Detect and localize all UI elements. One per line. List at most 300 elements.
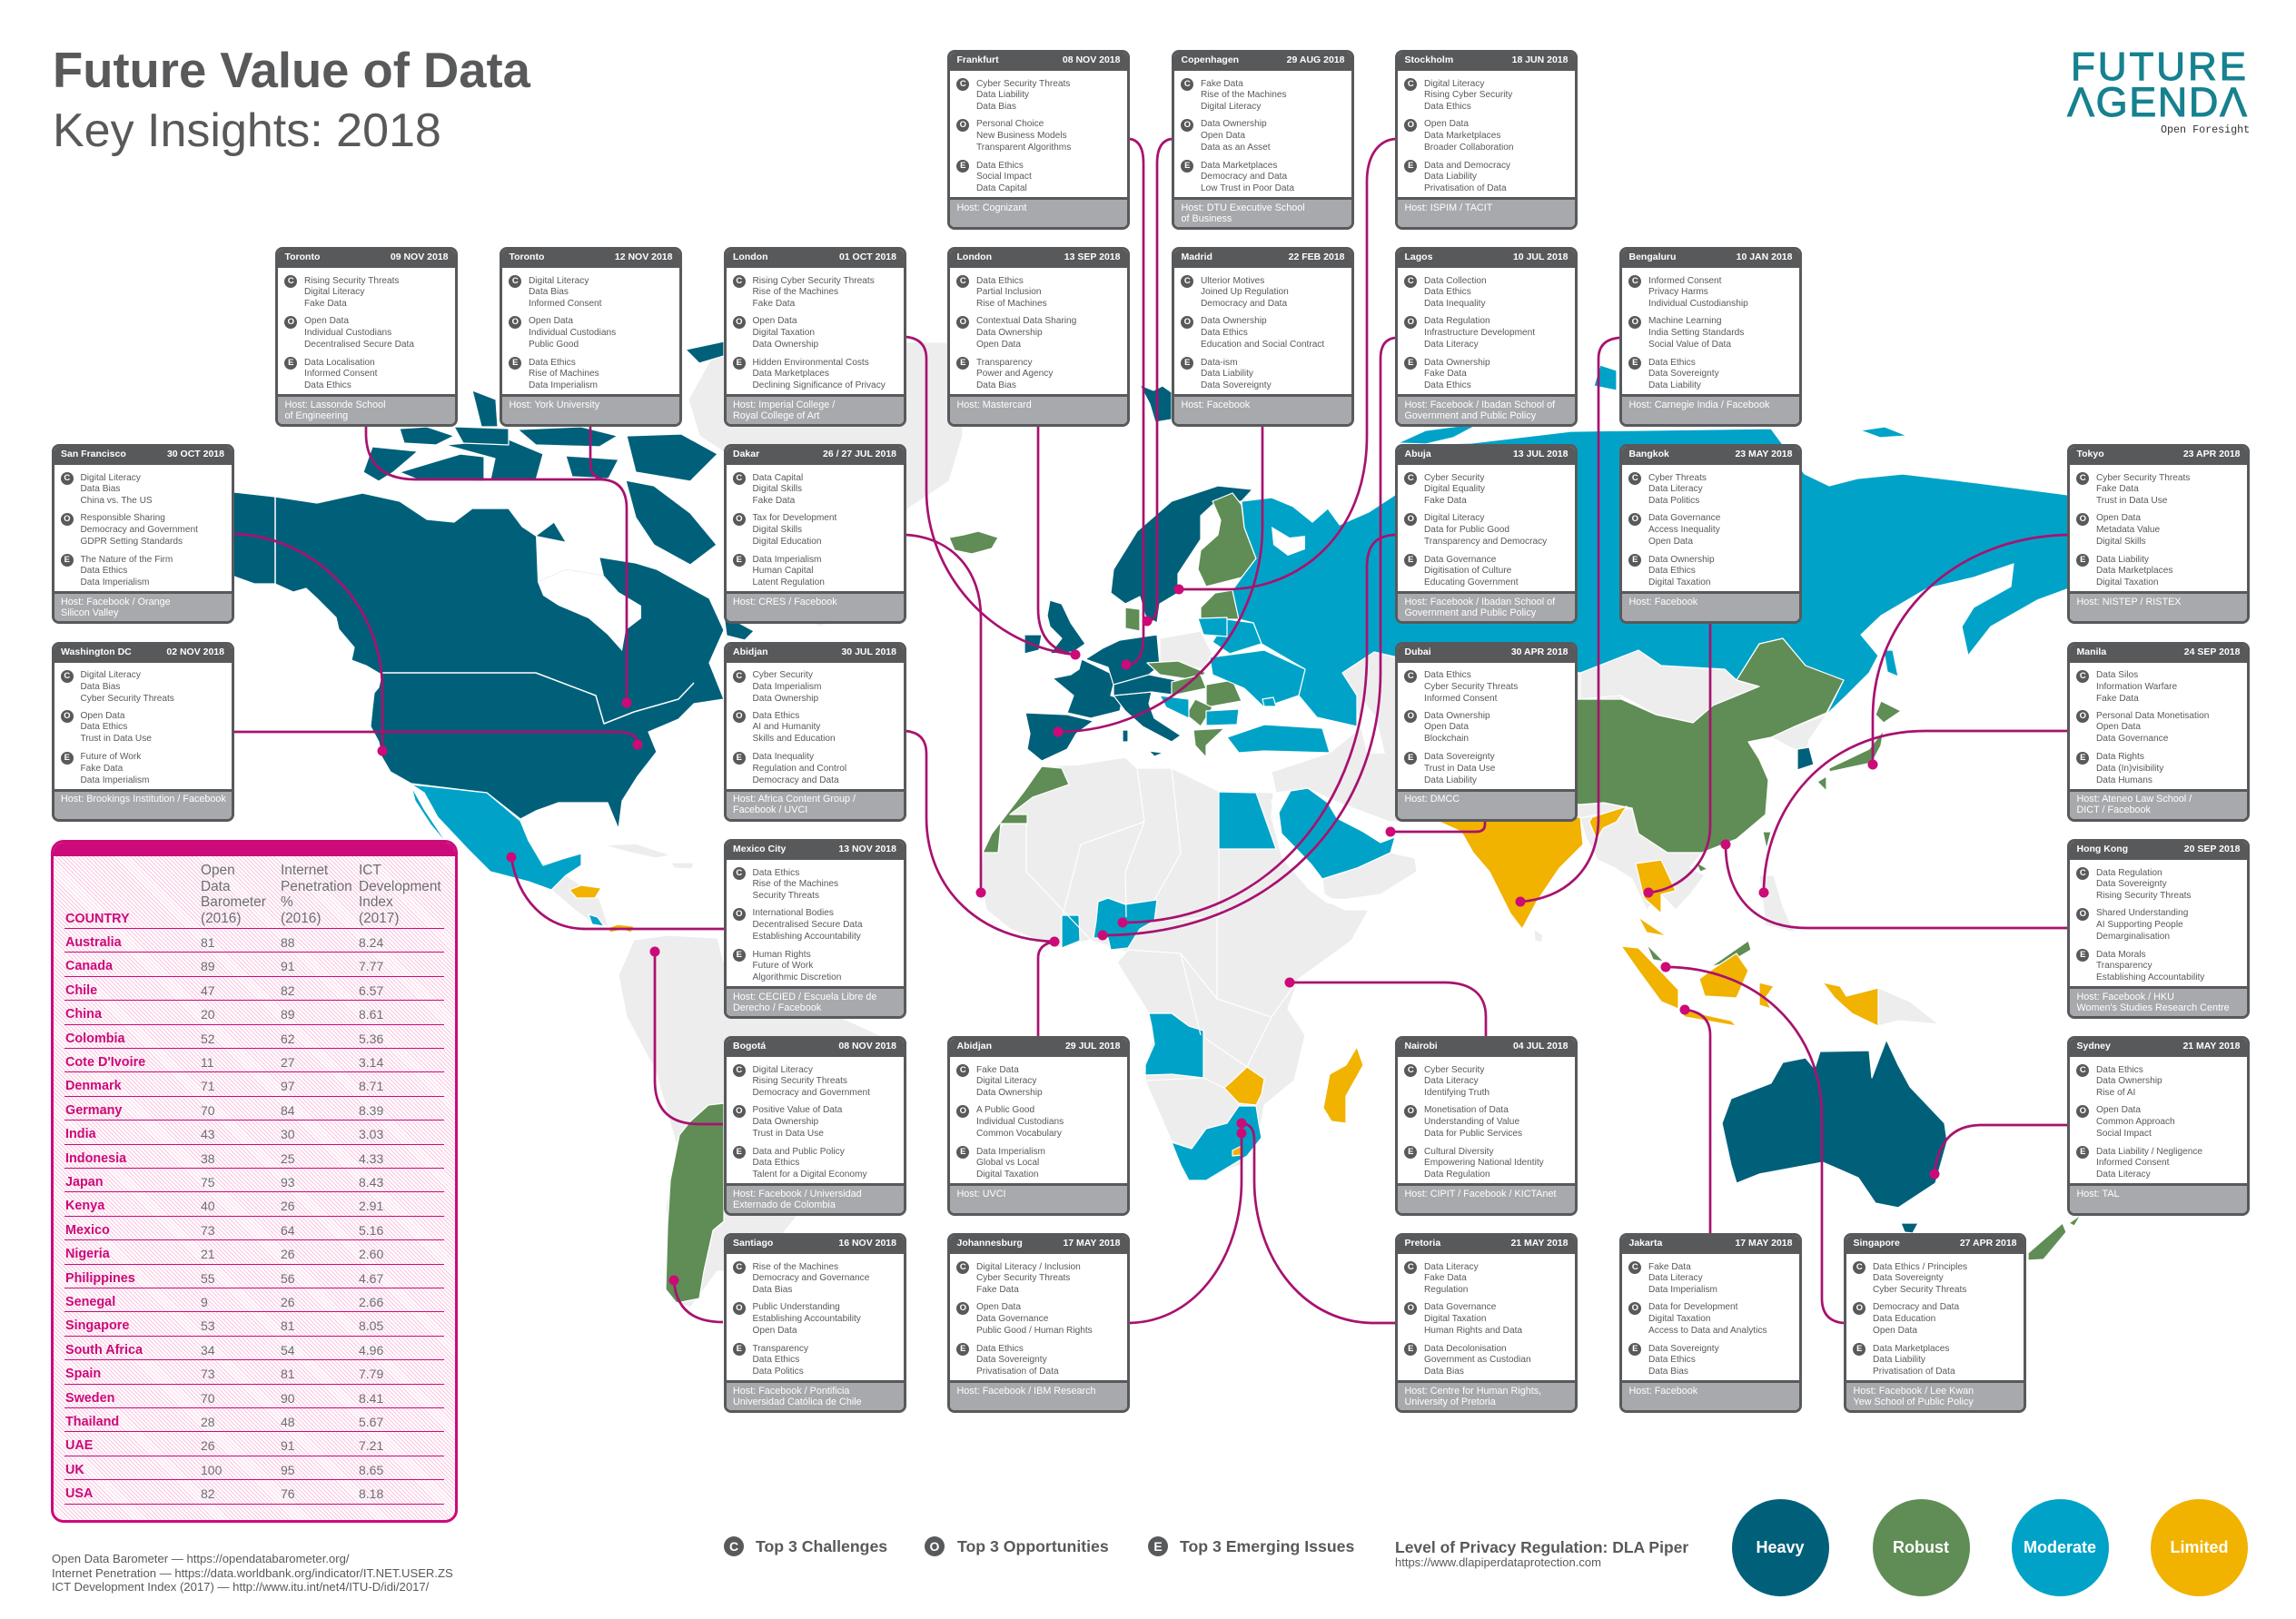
opportunities (752, 908, 905, 943)
challenges: Rise of the Machines (752, 1262, 838, 1271)
opportunities: Data Ownership (1424, 710, 1490, 721)
emerging issues: Data Ethics (1648, 358, 1696, 367)
card: Abidjan 30 Jul (723, 641, 906, 821)
host: Host: Lassonde School (285, 400, 386, 410)
emerging issues (1424, 1344, 1577, 1378)
host: Host: Ateneo Law School / (2076, 794, 2192, 805)
host (950, 1183, 1127, 1216)
card: Stockholm: C (1408, 79, 1414, 89)
opportunities (1404, 513, 1548, 547)
header (727, 250, 903, 268)
header: 29 JUL 2018 (1065, 1041, 1121, 1051)
emerging issues (80, 752, 233, 787)
header: Manila (2076, 647, 2106, 657)
card: Santiago: C (736, 1262, 742, 1272)
challenges: Cyber Security (1424, 1064, 1484, 1075)
card: Dakar: E (737, 555, 742, 565)
card: London 01 Oct (723, 247, 906, 427)
emerging issues: Data Decolonisation (1424, 1344, 1507, 1353)
row: Canada: 89 (201, 959, 215, 973)
challenges (1648, 472, 1801, 508)
opportunities: Data Governance (976, 1314, 1048, 1324)
row: Sweden: 8.41 (359, 1391, 383, 1406)
emerging issues (1424, 752, 1577, 787)
card: Washington DC: O (64, 711, 71, 721)
emerging issues: Human Capital (752, 566, 813, 576)
challenges: Cyber Security (1424, 472, 1484, 483)
emerging issues: Data Bias (1424, 1367, 1464, 1377)
host (1398, 1380, 1575, 1413)
challenges: Data Ethics (1424, 102, 1471, 112)
header (2070, 842, 2247, 860)
row: Philippines: 55 (201, 1271, 215, 1286)
row: South Africa: South Africa (65, 1343, 143, 1357)
opportunities (1873, 1302, 2025, 1338)
opportunities (956, 316, 1076, 350)
emerging issues: Data Liability (1424, 775, 1477, 785)
emerging issues (1404, 160, 1510, 193)
opportunities (2096, 710, 2249, 745)
header: 26 / 27 JUL 2018 (823, 449, 896, 459)
host: DICT / Facebook (2076, 805, 2151, 815)
challenges (2096, 670, 2249, 706)
card: Frankfurt: C (960, 79, 966, 89)
challenges: Rising Cyber Security (1424, 90, 1512, 100)
challenges: Fake Data (1648, 1262, 1691, 1271)
card: London 01 Oct: O (736, 316, 743, 327)
challenges: Data Bias (976, 102, 1016, 112)
data sources (52, 1552, 453, 1594)
header: 27 APR 2018 (1960, 1238, 2016, 1249)
opportunities: Personal Choice (976, 119, 1044, 129)
card: Bangkok: C (1632, 473, 1638, 483)
opportunities: Common Vocabulary (976, 1129, 1062, 1139)
opportunities: Data Ownership (1201, 316, 1267, 326)
challenges: Rising Security Threats (752, 1076, 847, 1086)
row: Kenya: 40 (201, 1199, 215, 1213)
row: Indonesia: Indonesia (65, 1151, 126, 1166)
host: Derecho / Facebook (733, 1002, 821, 1013)
challenges (1404, 472, 1485, 506)
opportunities: International Bodies (752, 908, 834, 918)
challenges: Data Literacy (1424, 1262, 1479, 1271)
emerging issues (956, 160, 1032, 193)
host: Host: Mastercard (957, 400, 1032, 410)
header: London (733, 252, 767, 262)
row: Thailand (64, 1408, 444, 1432)
opportunities: Understanding of Value (1424, 1117, 1519, 1127)
opportunities (976, 1105, 1129, 1140)
header (1398, 250, 1575, 268)
opportunities: Establishing Accountability (752, 1314, 861, 1324)
header (1622, 447, 1799, 465)
row: South Africa: 54 (281, 1343, 295, 1357)
emerging issues: Data Ethics (80, 566, 127, 576)
challenges: Data Ethics (752, 868, 799, 877)
challenges: Privacy Harms (1648, 287, 1708, 297)
opportunities: Open Data (1201, 131, 1245, 141)
card: Abidjan 30 Jul: C (736, 670, 742, 681)
card: Washington DC: E (64, 752, 70, 763)
row: USA: USA (65, 1486, 93, 1501)
emerging issues: Educating Government (1424, 578, 1519, 587)
header: Bengaluru (1629, 252, 1676, 262)
opportunities (509, 316, 616, 350)
challenges: Fake Data (304, 299, 347, 309)
challenges: Individual Custodianship (1648, 299, 1748, 309)
line: Madrid (1058, 427, 1262, 732)
opportunities: Open Data (752, 1326, 797, 1336)
emerging issues: Global vs Local (976, 1158, 1039, 1168)
host: Host: Facebook / Ibadan School of (1404, 400, 1555, 410)
header: Bangkok (1629, 449, 1669, 459)
column header: Internet Penetration: % (281, 894, 293, 910)
card: Pretoria: C (1408, 1262, 1414, 1272)
card: Santiago: E (737, 1344, 742, 1354)
challenges: Digital Literacy (752, 1064, 813, 1075)
host: Host: DMCC (1404, 794, 1460, 805)
opportunities: Data Ownership (1201, 119, 1267, 129)
icon: E badge: E (1153, 1539, 1163, 1554)
emerging issues: Data Morals (2096, 950, 2146, 959)
host: Facebook / UVCI (733, 805, 807, 815)
data sources: ICT Development Index (2017) — http://www.itu.int/net4/ITU-D/idi/2017/ (52, 1580, 429, 1594)
row: Japan: Japan (65, 1175, 104, 1190)
row: Colombia: 5.36 (359, 1032, 383, 1046)
row: Philippines: 4.67 (359, 1271, 383, 1286)
card: Toronto 12 Nov: E (512, 358, 518, 368)
challenges (752, 1262, 905, 1297)
opportunities (1181, 316, 1324, 350)
host (2070, 591, 2247, 624)
header: 01 OCT 2018 (839, 252, 896, 262)
card: Santiago: O (736, 1302, 743, 1313)
row: UK: 100 (201, 1463, 222, 1477)
card: Bogotá: E (737, 1147, 742, 1157)
emerging issues: Data Bias (976, 380, 1016, 390)
row: UK: 8.65 (359, 1463, 383, 1477)
opportunities (1648, 1302, 1801, 1338)
challenges: Data Bias (80, 484, 120, 494)
row: South Africa: 4.96 (359, 1343, 383, 1357)
emerging issues: Government as Custodian (1424, 1355, 1531, 1365)
row: Sweden: 70 (201, 1391, 215, 1406)
legend: privacy regulation source: https://www.dlapiperdataprotection.com (1395, 1555, 1601, 1569)
card: Stockholm (1395, 50, 1578, 230)
card: Singapore: E (1856, 1344, 1862, 1354)
challenges: Data Ownership (976, 1088, 1043, 1098)
header (1622, 1236, 1799, 1254)
row: UAE: UAE (65, 1438, 93, 1453)
card: Pretoria: E (1408, 1344, 1413, 1354)
header (1622, 250, 1799, 268)
card: Bogotá (723, 1036, 906, 1216)
challenges: Rise of the Machines (1201, 90, 1287, 100)
host: Host: Facebook / Ibadan School of (1404, 596, 1555, 607)
challenges: Data Bias (80, 682, 120, 692)
row: Sweden: 90 (281, 1391, 295, 1406)
row: Cote D'Ivoire: 3.14 (359, 1055, 383, 1070)
emerging issues: Data Ethics (752, 1355, 799, 1365)
emerging issues (752, 752, 905, 787)
challenges (1404, 78, 1513, 112)
card: Bogotá: O (736, 1106, 743, 1115)
opportunities: AI Supporting People (2096, 920, 2183, 930)
opportunities: Open Data (976, 1302, 1021, 1312)
legend: top 3 opportunities (925, 1536, 1111, 1558)
row: Sweden (64, 1385, 444, 1408)
emerging issues: Regulation and Control (752, 764, 846, 774)
card: Dubai: C (1408, 670, 1414, 681)
challenges: Cyber Security Threats (976, 1273, 1070, 1283)
row: Canada: Canada (65, 959, 113, 973)
row: Germany: Germany (65, 1103, 122, 1118)
challenges (1404, 275, 1487, 309)
line: Hong Kong (1726, 844, 2067, 928)
header: Abuja (1404, 449, 1431, 459)
challenges: Cyber Security Threats (976, 78, 1070, 89)
emerging issues: Hidden Environmental Costs (752, 358, 869, 367)
card: Manila: E (2080, 752, 2085, 763)
host: Host: CRES / Facebook (733, 596, 837, 607)
row: Australia: 88 (281, 935, 295, 950)
row: Colombia: 62 (281, 1032, 295, 1046)
challenges: Data Ethics (1424, 287, 1471, 297)
row: Thailand: 28 (201, 1415, 215, 1429)
emerging issues: Data Imperialism (976, 1146, 1045, 1157)
line: Mexico City (511, 857, 724, 929)
column header: Internet Penetration: Penetration (281, 879, 352, 894)
header: 12 NOV 2018 (615, 252, 672, 262)
opportunities (2096, 908, 2249, 943)
card: London 01 Oct: C (736, 276, 742, 286)
card: San Francisco: E (64, 555, 70, 565)
header (54, 645, 231, 663)
emerging issues: Privatisation of Data (976, 1367, 1059, 1377)
opportunities (1648, 513, 1801, 548)
header: Sydney (2076, 1041, 2111, 1051)
line: Johannesburg (1130, 1133, 1242, 1323)
emerging issues: Informed Consent (2096, 1158, 2169, 1168)
card: Johannesburg: C (960, 1262, 966, 1272)
emerging issues (1424, 1146, 1577, 1181)
card: Bengaluru (1619, 247, 1802, 427)
row: Denmark (64, 1072, 444, 1097)
card: Jakarta: C (1632, 1262, 1638, 1272)
row: Kenya: Kenya (65, 1199, 104, 1213)
row: UAE: 26 (201, 1438, 215, 1453)
header: 09 NOV 2018 (391, 252, 449, 262)
host: Externado de Colombia (733, 1199, 836, 1210)
challenges (733, 275, 875, 309)
opportunities: Public Understanding (752, 1302, 840, 1312)
line: Lagos (1103, 338, 1395, 935)
emerging issues: Data Sovereignty (1424, 752, 1495, 762)
row: Mexico: 5.16 (359, 1223, 383, 1238)
card: Toronto 12 Nov: C (512, 276, 519, 286)
emerging issues: Data Ownership (1648, 554, 1715, 565)
host (727, 986, 903, 1019)
opportunities: Responsible Sharing (80, 513, 165, 523)
row: USA (64, 1480, 444, 1505)
challenges (2096, 472, 2249, 508)
opportunities: Digital Skills (2096, 537, 2146, 547)
emerging issues: Fake Data (1424, 369, 1467, 379)
map: moderate regulation countries (411, 365, 2180, 1180)
opportunities: Tax for Development (752, 513, 836, 523)
row: Chile: 6.57 (359, 983, 383, 998)
challenges: Cyber Security Threats (1873, 1285, 1966, 1295)
row: Chile: 47 (201, 983, 215, 998)
challenges (956, 78, 1070, 112)
row: India: 3.03 (359, 1127, 383, 1141)
row: Mexico: 64 (281, 1223, 295, 1238)
challenges: Data Ownership (2096, 1076, 2162, 1086)
card: Toronto 09 Nov: E (288, 358, 293, 368)
challenges (752, 670, 905, 706)
challenges (80, 670, 233, 706)
row: South Africa (64, 1337, 444, 1360)
emerging issues: Democracy and Data (752, 775, 839, 785)
host: Host: Brookings Institution / Facebook (61, 794, 226, 805)
row: Chile: 82 (281, 983, 295, 998)
challenges: Fake Data (1424, 1273, 1467, 1283)
emerging issues: Data Imperialism (529, 380, 598, 390)
row: China: China (65, 1007, 102, 1022)
legend circle: Moderate: Moderate (2024, 1538, 2096, 1556)
header (278, 250, 455, 268)
line: Abidjan 30 Jul (906, 731, 1054, 942)
host (727, 591, 903, 624)
challenges: Rising Security Threats (2096, 891, 2191, 901)
emerging issues: Transparency (976, 358, 1033, 367)
emerging issues (1404, 357, 1490, 390)
opportunities: Infrastructure Development (1424, 328, 1535, 338)
row: Singapore: 81 (281, 1318, 295, 1333)
challenges: Data Regulation (2096, 868, 2162, 877)
challenges (2096, 868, 2249, 903)
emerging issues (2096, 752, 2249, 787)
row: China (64, 1001, 444, 1025)
header (1398, 53, 1575, 71)
row: Colombia (64, 1025, 444, 1049)
row: Senegal: 26 (281, 1295, 295, 1309)
emerging issues: Data Marketplaces (752, 369, 829, 379)
line: Toronto 12 Nov (590, 427, 607, 479)
emerging issues: Data Capital (976, 183, 1027, 193)
opportunities: Open Data (304, 316, 349, 326)
card: Abidjan 30 Jul: O (736, 711, 743, 721)
card: Toronto 09 Nov: O (288, 316, 294, 327)
emerging issues (752, 1146, 905, 1181)
host: Host: DTU Executive School (1181, 202, 1305, 212)
header: Toronto (285, 252, 320, 262)
row: South Africa: 34 (201, 1343, 215, 1357)
label: Top 3 Emerging Issues (1180, 1537, 1354, 1555)
row: Denmark: 71 (201, 1079, 215, 1093)
line: Dakar (906, 535, 981, 893)
subtitle: Key Insights: 2018 (53, 104, 441, 157)
challenges: Fake Data (752, 299, 795, 309)
header (950, 1039, 1127, 1057)
challenges: Data Silos (2096, 670, 2138, 680)
row: Singapore (64, 1312, 444, 1337)
card: Madrid (1172, 247, 1354, 427)
card: San Francisco: C (64, 473, 70, 483)
emerging issues: Digital Taxation (2096, 578, 2158, 587)
host: Host: Facebook / Orange (61, 596, 171, 607)
line: Frankfurt (1126, 139, 1143, 665)
card: London 01 Oct: E (737, 358, 742, 368)
card: London 13 Sep (947, 247, 1130, 427)
header: 21 MAY 2018 (1510, 1238, 1568, 1249)
card: Hong Kong: O (2080, 908, 2086, 919)
opportunities: AI and Humanity (752, 722, 820, 732)
line: Dubai (1390, 821, 1485, 832)
emerging issues: Data Ethics (976, 160, 1024, 171)
card: Nairobi: C (1408, 1065, 1414, 1075)
host (1174, 394, 1351, 427)
card: Pretoria: O (1408, 1302, 1414, 1313)
row: USA: 76 (281, 1486, 295, 1501)
header: Jakarta (1629, 1238, 1662, 1249)
card: Bangkok: E (1632, 555, 1638, 565)
host (1622, 394, 1799, 427)
emerging issues (2096, 950, 2249, 984)
line: Singapore (1666, 967, 1844, 1323)
challenges: Security Threats (752, 891, 819, 901)
emerging issues: Data Ownership (1424, 358, 1490, 367)
challenges: Democracy and Government (752, 1088, 870, 1098)
challenges: Fake Data (1424, 496, 1467, 506)
opportunities: Broader Collaboration (1424, 143, 1513, 153)
challenges (956, 275, 1047, 309)
challenges: Data Capital (752, 472, 803, 483)
challenges: Data Literacy (1648, 484, 1703, 494)
data sources: Internet Penetration — https://data.worldbank.org/indicator/IT.NET.USER.ZS (52, 1566, 453, 1580)
host: Government and Public Policy (1404, 607, 1536, 618)
card: Pretoria (1395, 1233, 1578, 1413)
opportunities: Open Data (2096, 1105, 2141, 1115)
challenges: Digital Literacy (1424, 78, 1484, 89)
header (1846, 1236, 2024, 1254)
header (1174, 53, 1351, 71)
card: Johannesburg (947, 1233, 1130, 1413)
opportunities: Data Ownership (976, 328, 1043, 338)
row: Japan: 8.43 (359, 1175, 383, 1190)
emerging issues: Data Inequality (752, 752, 814, 762)
row: Nigeria: 2.60 (359, 1247, 383, 1261)
data sources: Open Data Barometer — https://opendatabarometer.org/ (52, 1552, 350, 1565)
emerging issues: Transparency (2096, 961, 2152, 971)
header (1174, 250, 1351, 268)
card: Abidjan 29 Jul: E (960, 1147, 965, 1157)
card: Washington DC (51, 641, 234, 821)
column header: ICT Development Index: (2017) (359, 911, 400, 926)
opportunities: Data for Public Good (1424, 525, 1509, 535)
card: Sydney: O (2080, 1106, 2086, 1115)
card: Copenhagen: E (1184, 161, 1190, 171)
emerging issues (733, 357, 886, 390)
emerging issues: Data Ethics (1424, 380, 1471, 390)
opportunities: Data Literacy (1424, 340, 1479, 350)
row: Germany (64, 1097, 444, 1120)
challenges: Partial Inclusion (976, 287, 1041, 297)
opportunities: Individual Custodians (976, 1117, 1064, 1127)
row: Canada: 7.77 (359, 959, 383, 973)
opportunities (2096, 513, 2249, 548)
header: Abidjan (957, 1041, 992, 1051)
